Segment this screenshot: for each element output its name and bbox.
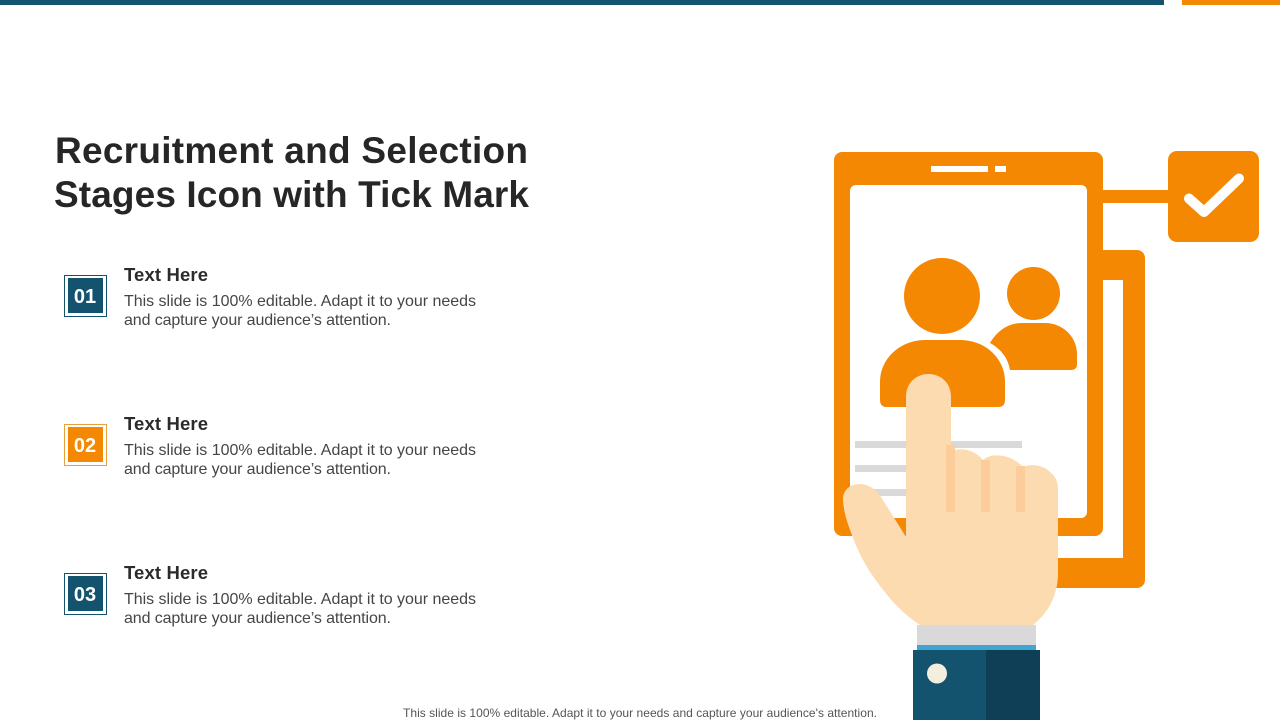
description 01: and capture your audience’s attention. — [124, 312, 391, 329]
illustration: tablet, candidates and pointing hand — [834, 151, 1259, 720]
shirt cuff — [917, 625, 1036, 645]
list item 01 — [64, 264, 476, 329]
icon: first candidate — [880, 258, 1005, 407]
description 02: and capture your audience’s attention. — [124, 461, 391, 478]
icon: pointing hand — [843, 374, 1058, 625]
description 03 — [124, 591, 476, 627]
description 03: and capture your audience’s attention. — [124, 610, 391, 627]
document text lines — [855, 441, 1022, 496]
footer note: This slide is 100% editable. Adapt it to your needs and capture your audience's attention. — [403, 706, 877, 720]
heading 03: Text Here — [124, 562, 208, 583]
connector to tick box — [1100, 190, 1172, 203]
badge 03 — [64, 574, 106, 614]
description 03: This slide is 100% editable. Adapt it to your needs — [124, 591, 476, 608]
badge 02: 02 — [74, 435, 96, 457]
heading 01: Text Here — [124, 264, 208, 285]
badge 01: 01 — [74, 286, 96, 308]
title — [54, 130, 529, 215]
description 02: This slide is 100% editable. Adapt it to your needs — [124, 442, 476, 459]
back document — [1045, 250, 1145, 588]
description 02 — [124, 442, 476, 478]
title: Stages Icon with Tick Mark — [54, 174, 529, 215]
description 01 — [124, 293, 476, 329]
top bar: teal — [0, 0, 1164, 5]
sleeve — [913, 650, 1040, 720]
tick box icon — [1168, 151, 1259, 242]
list item 02 — [64, 413, 476, 478]
badge 01 — [64, 276, 106, 316]
cuff trim — [917, 645, 1036, 650]
badge 02 — [64, 424, 106, 466]
heading 02: Text Here — [124, 413, 208, 434]
finger creases — [946, 445, 1025, 512]
icon: second candidate — [990, 267, 1077, 370]
title: Recruitment and Selection — [55, 130, 528, 171]
top bar: orange — [1182, 0, 1280, 5]
badge 03: 03 — [74, 584, 96, 606]
list item 03 — [64, 562, 476, 627]
description 01: This slide is 100% editable. Adapt it to your needs — [124, 293, 476, 310]
tablet — [834, 152, 1103, 536]
